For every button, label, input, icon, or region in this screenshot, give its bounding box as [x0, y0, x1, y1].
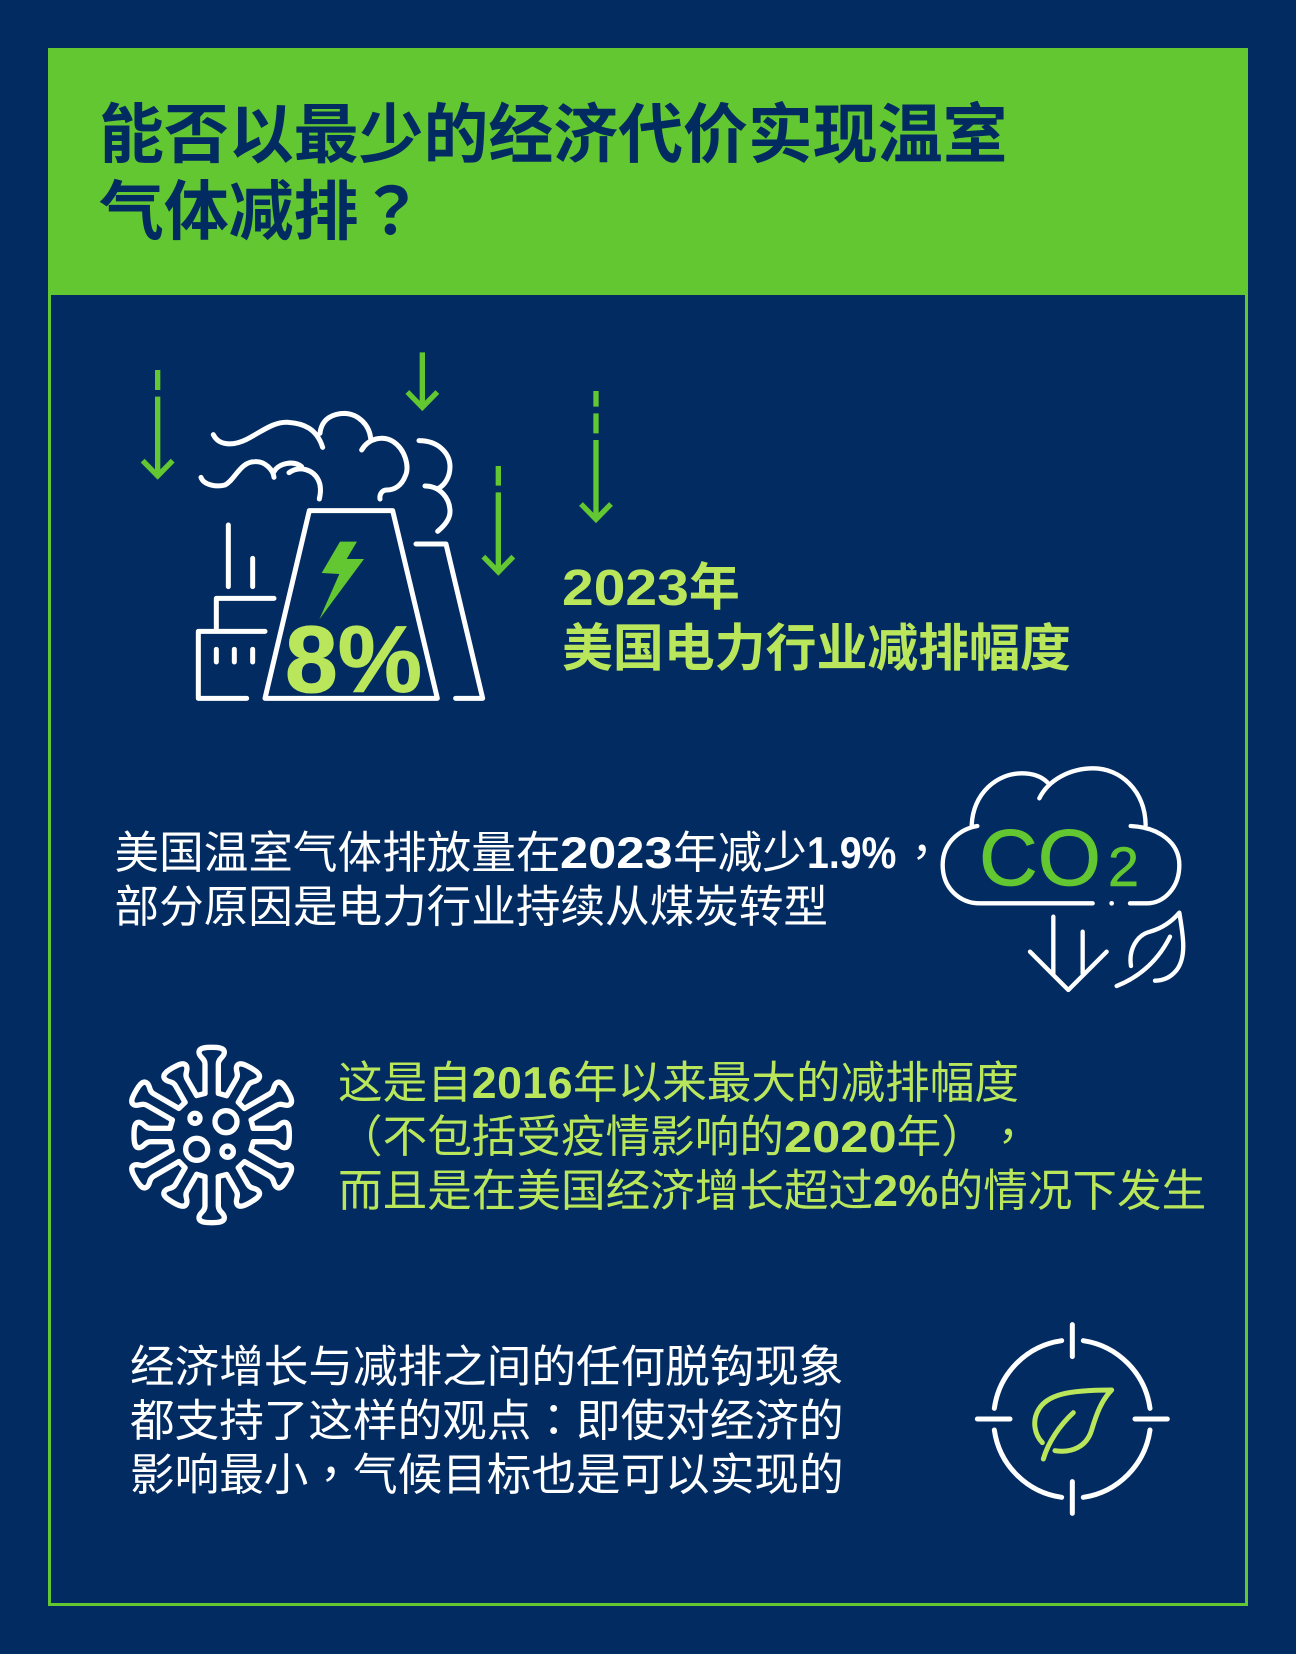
text: emissions: 美国温室气体排放量在 年减少 ， [114, 816, 944, 881]
stat: 8%: 8% [285, 607, 422, 713]
icon: CO2 cloud with arrow and leaf: CO [979, 813, 1101, 902]
stat label: 美国电力行业减排幅度 [562, 620, 1071, 677]
title: 能否以最少的经济代价实现温室 [99, 98, 1007, 171]
text: decoupling: 影响最小，气候目标也是可以实现的 [130, 1438, 844, 1503]
text: largest reduction since 2016: 而且是在美国经济增长超过2%的情况下发生 [338, 1167, 1206, 1216]
text: largest reduction since 2016: （不包括受疫情影响的 年）， [338, 1100, 1030, 1165]
header band [48, 48, 1248, 295]
stat label [562, 559, 1071, 677]
stat label: 2023 [562, 559, 689, 616]
title: 气体减排？ [99, 159, 423, 253]
text: largest reduction since 2016: 这是自2016年以来最大的减排幅度 [338, 1059, 1019, 1108]
stat label: 年 [689, 559, 740, 616]
icon: CO2 cloud with arrow and leaf: 2 [1108, 835, 1139, 898]
text: emissions: 部分原因是电力行业持续从煤炭转型 [114, 883, 828, 932]
title [99, 98, 1007, 253]
text: decoupling: 经济增长与减排之间的任何脱钩现象 [130, 1343, 844, 1392]
text: decoupling [130, 1343, 844, 1503]
text: emissions [114, 816, 944, 932]
text: decoupling: 都支持了这样的观点：即使对经济的 [130, 1384, 844, 1449]
text: emissions: 2023 [560, 829, 673, 878]
text: largest reduction since 2016 [338, 1059, 1206, 1216]
text: largest reduction since 2016: 2020 [784, 1113, 897, 1162]
text: emissions: 1.9% [807, 829, 896, 878]
